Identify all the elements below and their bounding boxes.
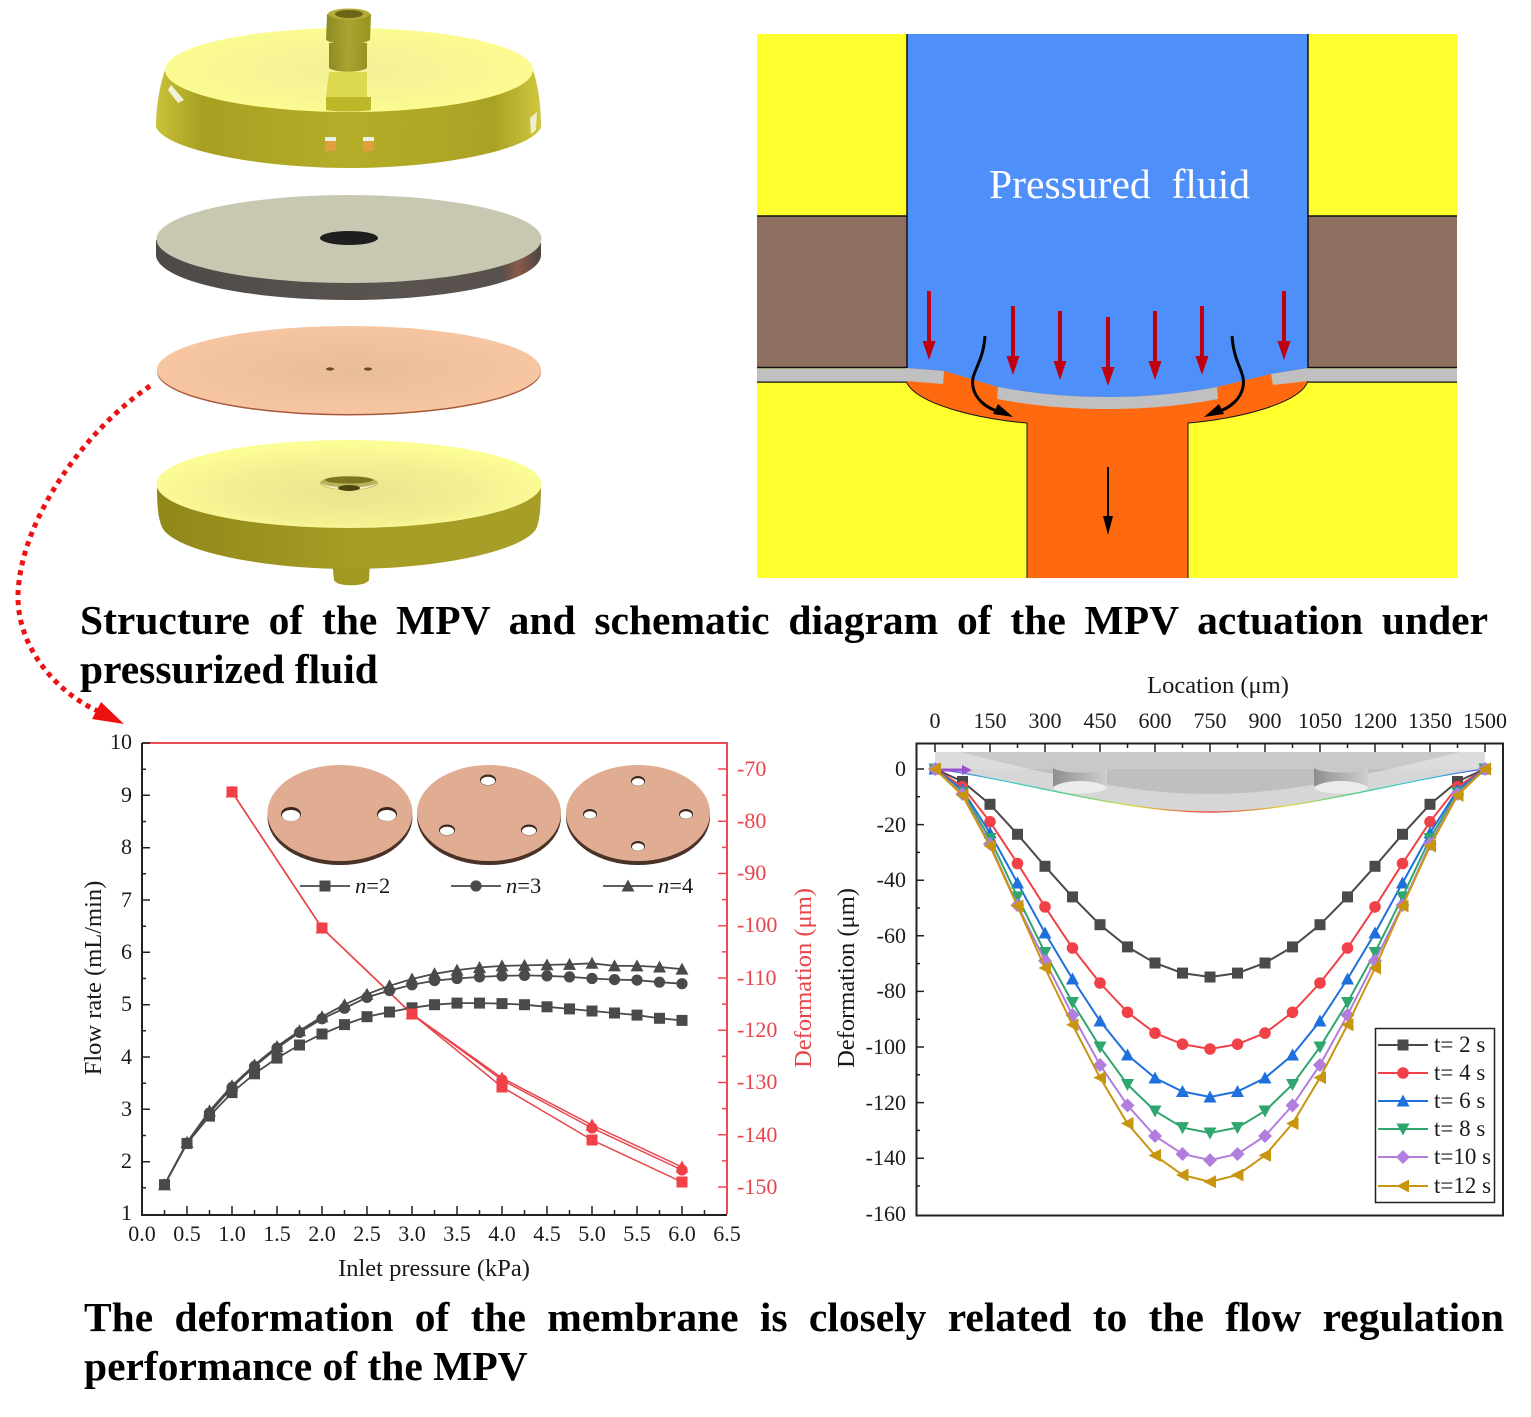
axis title: deformation: Deformation (μm)	[790, 888, 817, 1068]
top axis numbers: 300	[1028, 708, 1062, 733]
series t = 10 s	[935, 769, 1485, 1160]
axis title: location: Location (μm)	[1147, 672, 1289, 699]
top axis numbers	[930, 708, 1507, 733]
bottom yellow housing disc	[156, 440, 542, 585]
legend: time series: t= 4 s	[1434, 1060, 1485, 1085]
series t = 2 s	[935, 769, 1485, 977]
left axis numbers: 5	[121, 991, 132, 1016]
legend: time series: t= 2 s	[1434, 1032, 1485, 1057]
right chart: deformation vs location	[833, 672, 1507, 1226]
right axis numbers	[737, 756, 777, 1199]
legend: number of holes	[300, 873, 693, 898]
left axis numbers: -20	[877, 812, 906, 837]
gray middle disc	[156, 195, 542, 300]
legend: time series: t=12 s	[1434, 1173, 1491, 1198]
left axis numbers: 2	[121, 1148, 132, 1173]
series t = 4 s	[935, 769, 1485, 1049]
dotted red arrow from membrane to chart	[18, 386, 150, 724]
red pressure arrows	[922, 291, 1290, 386]
left axis numbers: 10	[110, 729, 132, 754]
right axis numbers: -90	[737, 860, 766, 885]
caption: membrane deformation: The deformation of the membrane is closely related to the flow regulation performance of the MPV	[84, 1294, 1504, 1389]
axis title: inlet pressure: Inlet pressure (kPa)	[338, 1255, 530, 1282]
chart frame and ticks	[916, 744, 1503, 1216]
right axis numbers: -150	[737, 1174, 777, 1199]
bottom axis numbers: 0.5	[173, 1221, 201, 1246]
bottom axis numbers: 2.5	[353, 1221, 381, 1246]
left axis numbers: -160	[866, 1201, 906, 1226]
top axis numbers: 0	[930, 708, 940, 733]
bottom axis numbers: 6.0	[668, 1221, 696, 1246]
exploded view of the MPV	[156, 8, 542, 585]
left axis numbers: 9	[121, 782, 132, 807]
series t = 8 s	[935, 769, 1485, 1133]
left axis numbers: 7	[121, 887, 132, 912]
top axis numbers: 1200	[1353, 708, 1397, 733]
right axis numbers: -100	[737, 912, 777, 937]
bottom axis numbers: 4.5	[533, 1221, 561, 1246]
left axis numbers: -40	[877, 867, 906, 892]
left chart: flow rate and deformation vs inlet pressure	[80, 729, 817, 1282]
right axis numbers: -110	[737, 965, 777, 990]
chart axes	[142, 743, 727, 1215]
left axis numbers: 6	[121, 939, 132, 964]
orange outflow	[906, 368, 1308, 578]
legend: time series: t= 6 s	[1434, 1088, 1485, 1113]
copper membrane disc	[157, 326, 541, 416]
left axis numbers: -60	[877, 923, 906, 948]
legend: time series: t=10 s	[1434, 1144, 1491, 1169]
left axis numbers: 4	[121, 1044, 132, 1069]
bottom axis numbers: 4.0	[488, 1221, 516, 1246]
yellow housing background	[757, 34, 1457, 578]
left axis numbers: 1	[121, 1200, 132, 1225]
left axis numbers	[110, 729, 132, 1225]
bottom axis numbers: 5.0	[578, 1221, 606, 1246]
bottom axis numbers: 1.0	[218, 1221, 246, 1246]
inset disc: four holes	[566, 765, 710, 865]
right axis numbers: -140	[737, 1122, 777, 1147]
legend: number of holes: n=4	[658, 873, 693, 898]
right axis numbers: -120	[737, 1017, 777, 1042]
bottom axis numbers: 6.5	[713, 1221, 741, 1246]
top axis numbers: 900	[1248, 708, 1282, 733]
bottom axis numbers: 5.5	[623, 1221, 651, 1246]
left axis numbers: -80	[877, 978, 906, 1003]
right axis numbers: -130	[737, 1069, 777, 1094]
top axis numbers: 1500	[1463, 708, 1507, 733]
right axis numbers: -70	[737, 756, 766, 781]
bottom axis numbers: 3.0	[398, 1221, 426, 1246]
top axis numbers: 600	[1138, 708, 1172, 733]
top axis numbers: 450	[1084, 708, 1116, 733]
caption: structure of the MPV: Structure of the MPV and schematic diagram of the MPV actuation under pressurized fluid	[80, 597, 1488, 692]
left axis numbers: -100	[866, 1034, 906, 1059]
black flow arrows	[973, 336, 1243, 535]
axis title: deformation: Deformation (μm)	[833, 888, 860, 1068]
left axis numbers: 3	[121, 1096, 132, 1121]
series t = 6 s	[935, 769, 1485, 1097]
legend: number of holes: n=3	[506, 873, 541, 898]
outlines	[757, 34, 1457, 578]
flow rate series	[164, 963, 682, 1185]
legend: time series: t= 8 s	[1434, 1116, 1485, 1141]
membrane 3D inset	[935, 752, 1485, 812]
top axis numbers: 1350	[1408, 708, 1452, 733]
bottom axis numbers: 0.0	[128, 1221, 156, 1246]
bottom axis numbers: 2.0	[308, 1221, 336, 1246]
bottom axis numbers: 3.5	[443, 1221, 471, 1246]
top yellow housing disc	[156, 8, 541, 168]
left axis numbers: -120	[866, 1090, 906, 1115]
axis title: flow rate: Flow rate (mL/min)	[80, 881, 107, 1075]
legend: time series	[1376, 1028, 1494, 1202]
label: pressured fluid: Pressured fluid	[989, 161, 1250, 207]
left axis numbers: -140	[866, 1145, 906, 1170]
inset disc: two holes	[268, 765, 412, 865]
inset disc: three holes	[417, 765, 561, 865]
top axis numbers: 750	[1194, 708, 1226, 733]
left axis numbers	[866, 756, 906, 1226]
deformation series	[232, 792, 682, 1182]
left axis numbers: 8	[121, 834, 132, 859]
left axis numbers: 0	[895, 756, 906, 781]
schematic diagram of the MPV actuation	[757, 34, 1457, 578]
top axis numbers: 1050	[1298, 708, 1342, 733]
legend: number of holes: n=2	[355, 873, 390, 898]
brown seal blocks	[757, 216, 1457, 368]
bottom axis numbers: 1.5	[263, 1221, 291, 1246]
gray membrane	[757, 368, 1457, 409]
series t = 12 s	[935, 769, 1485, 1182]
blue pressured fluid	[907, 34, 1308, 397]
red square on top at 3 kPa	[406, 1008, 418, 1020]
bottom axis numbers	[128, 1221, 741, 1246]
right axis numbers: -80	[737, 808, 766, 833]
top axis numbers: 150	[974, 708, 1006, 733]
